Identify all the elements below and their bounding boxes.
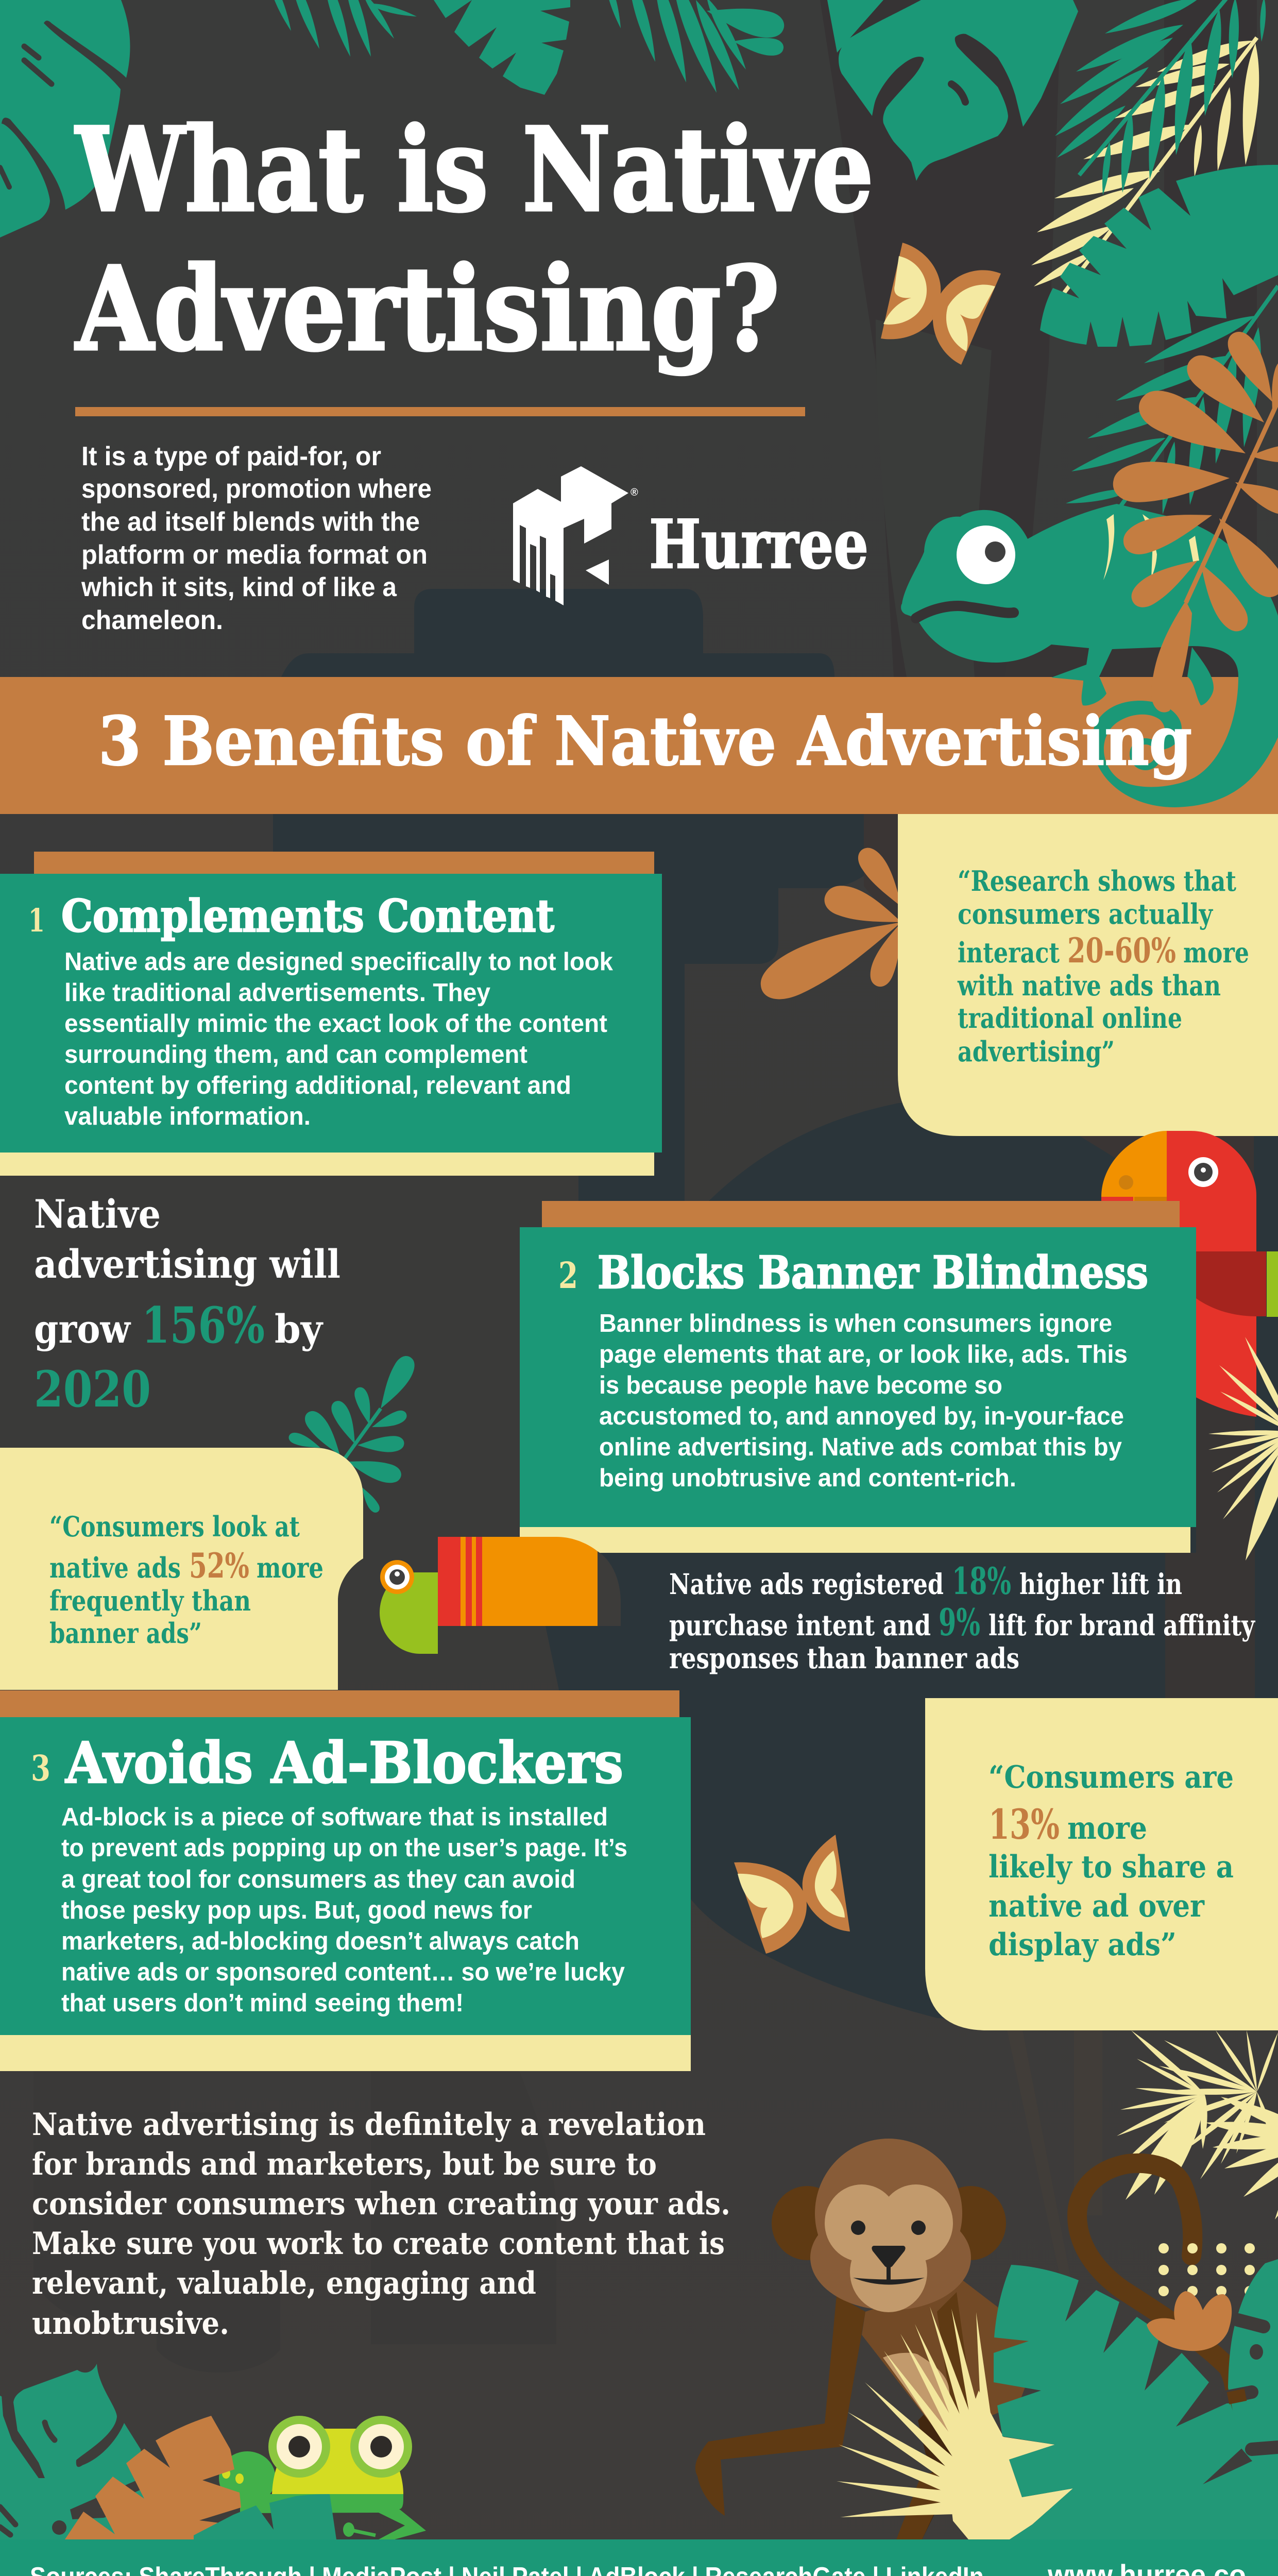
panel: consumers look quote: “Consumers look at [49, 1510, 300, 1543]
panel: benefit 1: surrounding them, and can complement [64, 1041, 527, 1069]
stat: purchase intent: 9% [939, 1600, 980, 1644]
monstera leaf: top right [827, 0, 1078, 181]
monstera leaf: bottom left [0, 2364, 155, 2539]
stat: native advertising growth: Native [34, 1191, 161, 1237]
panel: benefit 2: online advertising. Native ads combat this by [599, 1433, 1122, 1461]
stat: purchase intent: 18% [952, 1559, 1011, 1603]
panel: research quote: advertising” [958, 1035, 1115, 1068]
green leaf: bottom front [194, 2494, 336, 2539]
monstera leaf: top left [0, 0, 130, 238]
cream palm frond [1029, 35, 1263, 293]
banana leaf: right [1040, 165, 1278, 347]
panel: consumers share quote: 13% [989, 1800, 1060, 1849]
panel: consumers share quote: display ads” [989, 1927, 1177, 1963]
stat: native advertising growth: grow [34, 1306, 131, 1352]
intro text: platform or media format on [81, 540, 428, 570]
panel: benefit 2 [520, 1201, 1196, 1553]
closing text: for brands and marketers, but be sure to [32, 2146, 657, 2182]
orange banana leaf: bottom left [65, 2416, 241, 2539]
panel: benefit 3: to prevent ads popping up on the user’s page. It’s [61, 1834, 627, 1862]
panel: research quote: interact [958, 936, 1060, 969]
banner heading: 3 Benefits of Native Advertising [98, 702, 1192, 781]
orange leaf sprig [1112, 326, 1278, 713]
closing text: unobtrusive. [32, 2306, 229, 2342]
monkey tail [1077, 2163, 1236, 2400]
panel: benefit 3: those pesky pop ups. But, good news for [61, 1896, 532, 1924]
green palm frond: lower right [1065, 286, 1278, 515]
hurree logo: ® [631, 487, 638, 498]
panel: consumers look quote: frequently than [49, 1584, 251, 1617]
intro text [81, 442, 432, 635]
panel: consumers look quote: native ads [49, 1551, 181, 1584]
title: Advertising? [75, 241, 780, 377]
toucan [380, 1537, 621, 1654]
stat: native advertising growth: by [275, 1306, 323, 1352]
icon: butterfly lower [734, 1835, 850, 1954]
panel: research quote: consumers actually [958, 897, 1213, 930]
intro text: It is a type of paid-for, or [81, 442, 381, 471]
closing text [32, 2107, 730, 2342]
panel: benefit 2: Banner blindness is when consumers ignore [599, 1310, 1112, 1337]
panel: benefit 2: accustomed to, and annoyed by, in-your-face [599, 1402, 1124, 1430]
panel: consumers look quote: more [257, 1551, 323, 1584]
stat: native advertising growth: 156% [142, 1296, 265, 1354]
green leaf sprig [287, 1352, 420, 1515]
footer [0, 2539, 1278, 2576]
panel: benefit 1: like traditional advertisements. They [64, 979, 490, 1007]
stat: native advertising growth: 2020 [34, 1360, 151, 1418]
parrot [1101, 1131, 1278, 1417]
panel: consumers share quote: “Consumers are [989, 1759, 1234, 1795]
stat: purchase intent: Native ads registered [669, 1567, 944, 1601]
intro text: chameleon. [81, 605, 223, 635]
closing text: relevant, valuable, engaging and [32, 2265, 536, 2301]
panel: benefit 3: Avoids Ad-Blockers [65, 1730, 623, 1796]
cream palm: bottom [835, 2303, 1073, 2539]
intro text: which it sits, kind of like a [81, 572, 397, 602]
banner [0, 677, 1278, 814]
decorative dots [1158, 2243, 1255, 2296]
palm fronds: top [264, 0, 787, 95]
hurree logo [513, 466, 868, 605]
panel: consumers share quote [925, 1698, 1278, 2030]
closing text: consider consumers when creating your ads. [32, 2186, 730, 2222]
panel: consumers look quote: 52% [189, 1546, 249, 1586]
palm fan: upper right [1116, 2028, 1278, 2222]
panel: benefit 3: native ads or sponsored content… so we’re lucky [61, 1958, 625, 1986]
stat: purchase intent: responses than banner ads [669, 1641, 1019, 1675]
panel: benefit 1: valuable information. [64, 1103, 311, 1130]
palm frond: over parrot [1208, 1335, 1278, 1564]
panel: benefit 1: content by offering additional, relevant and [64, 1072, 571, 1099]
panel: benefit 2: 2 [558, 1254, 578, 1297]
intro text: the ad itself blends with the [81, 507, 420, 537]
panel: benefit 1 [0, 852, 662, 1176]
panel: research quote: 20-60% [1067, 930, 1176, 971]
closing text: Make sure you work to create content that is [32, 2226, 725, 2262]
panel: benefit 3: 3 [31, 1748, 50, 1789]
green palm frond: top right [1051, 0, 1267, 196]
panel: benefit 3: Ad-block is a piece of software that is installed [61, 1803, 608, 1831]
banana leaf: top centre [434, 0, 570, 95]
monkey [695, 2139, 1042, 2539]
panel: research quote [898, 814, 1278, 1136]
panel: benefit 1: essentially mimic the exact look of the content [64, 1010, 607, 1038]
panel: benefit 2: being unobtrusive and content-rich. [599, 1464, 1016, 1492]
panel: benefit 3: a great tool for consumers as they can avoid [61, 1866, 575, 1893]
panel: research quote: more [1183, 936, 1249, 969]
panel: consumers share quote: likely to share a [989, 1849, 1234, 1885]
closing text: Native advertising is definitely a revelation [32, 2107, 706, 2143]
panel: consumers look quote: banner ads” [49, 1617, 202, 1650]
title: What is Native [75, 102, 874, 238]
panel: benefit 3 [0, 1690, 691, 2071]
panel: consumers share quote: more [1067, 1810, 1147, 1846]
panel: benefit 1: 1 [28, 902, 45, 939]
icon: butterfly top [881, 243, 1001, 365]
panel: benefit 3: marketers, ad-blocking doesn’t always catch [61, 1927, 580, 1955]
stat: native advertising growth [34, 1191, 340, 1418]
panel: consumers share quote: native ad over [989, 1888, 1205, 1924]
stat: purchase intent: purchase intent and [669, 1608, 931, 1642]
stat: purchase intent [669, 1559, 1256, 1675]
panel: research quote: traditional online [958, 1002, 1182, 1035]
intro text: sponsored, promotion where [81, 474, 432, 504]
frog [219, 2416, 426, 2539]
green banana leaf: bottom right [994, 2259, 1278, 2539]
flower [1147, 2291, 1232, 2351]
panel: consumers look quote [0, 1448, 363, 1690]
panel: benefit 1: Complements Content [61, 890, 554, 942]
stat: native advertising growth: advertising will [34, 1241, 340, 1287]
chameleon [901, 504, 1278, 807]
panel: benefit 2: page elements that are, or look like, ads. This [599, 1341, 1128, 1368]
panel: benefit 2: Blocks Banner Blindness [598, 1247, 1148, 1299]
title [75, 102, 874, 377]
panel: benefit 3: that users don’t mind seeing them! [61, 1989, 464, 2017]
title divider [75, 407, 805, 416]
stat: purchase intent: higher lift in [1019, 1567, 1182, 1601]
orange leaf sprig: behind research quote [753, 842, 913, 1008]
panel: research quote: with native ads than [957, 969, 1221, 1002]
hurree logo: Hurree [649, 505, 868, 584]
panel: benefit 2: is because people have become so [599, 1371, 1002, 1399]
panel: benefit 1: Native ads are designed specifically to not look [64, 948, 614, 976]
